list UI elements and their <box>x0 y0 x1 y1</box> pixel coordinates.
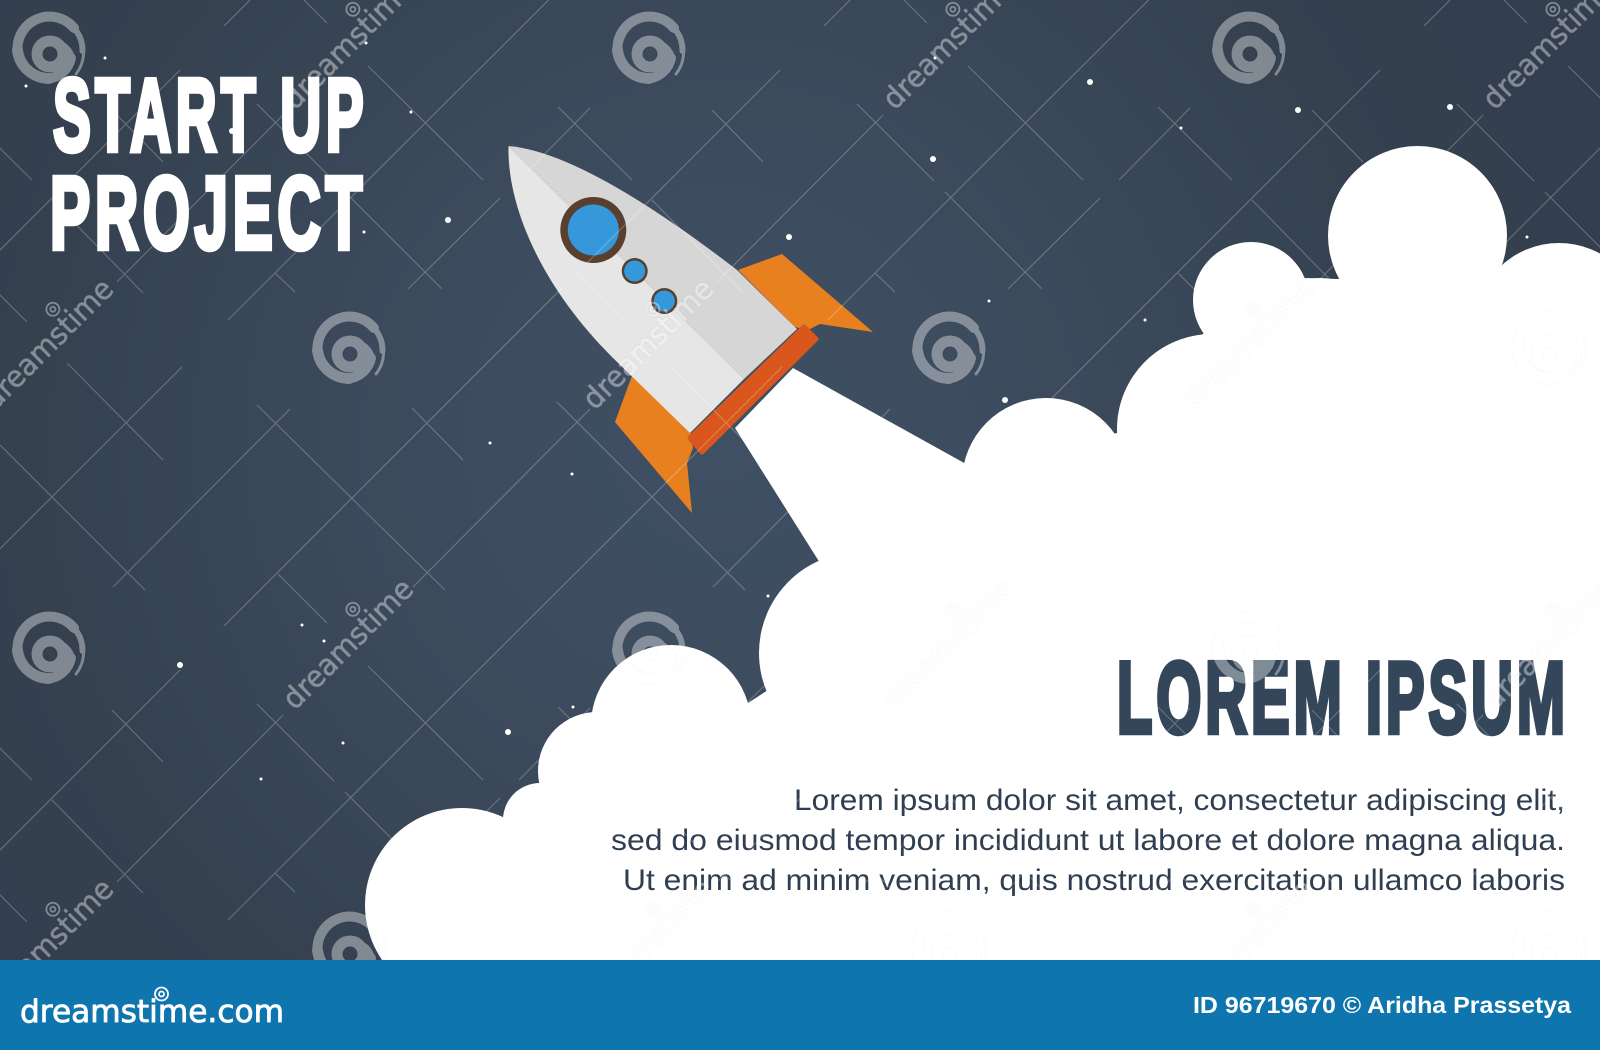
footer credit: ID 96719670 © Aridha Prassetya <box>1193 992 1572 1018</box>
watermark: diagonal wordmarks: dreamstime <box>1176 272 1320 416</box>
title: Start Up Project: START UP <box>53 58 368 172</box>
body text: sed do eiusmod tempor incididunt ut labore et dolore magna aliqua. <box>611 824 1565 857</box>
footer bar <box>0 960 1600 1050</box>
title: Start Up Project <box>50 58 368 270</box>
title: Start Up Project: PROJECT <box>50 156 367 270</box>
rocket window: middle <box>622 258 648 284</box>
watermark: diagonal wordmarks: dreamstime <box>576 872 720 1016</box>
rocket window: large <box>560 197 626 263</box>
footer logo: dreamstime.com: dreamstime.com <box>20 994 284 1030</box>
body text: Lorem ipsum dolor sit amet, consectetur adipiscing elit, <box>794 784 1565 817</box>
watermark: diagonal wordmarks: dreamstime <box>876 572 1020 716</box>
watermark: diagonal wordmarks: dreamstime <box>276 572 420 716</box>
cloud and rocket exhaust <box>365 146 1600 1002</box>
rocket base band <box>690 327 816 452</box>
rocket <box>508 146 873 513</box>
body text <box>611 784 1565 897</box>
rocket fin: top <box>738 254 873 332</box>
rocket window: small <box>651 288 677 314</box>
watermark: diagonal wordmarks: dreamstime <box>1176 872 1320 1016</box>
watermark: diagonal wordmarks: dreamstime <box>576 272 720 416</box>
stars <box>24 42 1528 780</box>
body text: Ut enim ad minim veniam, quis nostrud exercitation ullamco laboris <box>623 864 1565 897</box>
rocket body: light side <box>508 146 744 433</box>
rocket body: dark side <box>508 146 797 379</box>
rocket fin: bottom <box>615 373 693 513</box>
